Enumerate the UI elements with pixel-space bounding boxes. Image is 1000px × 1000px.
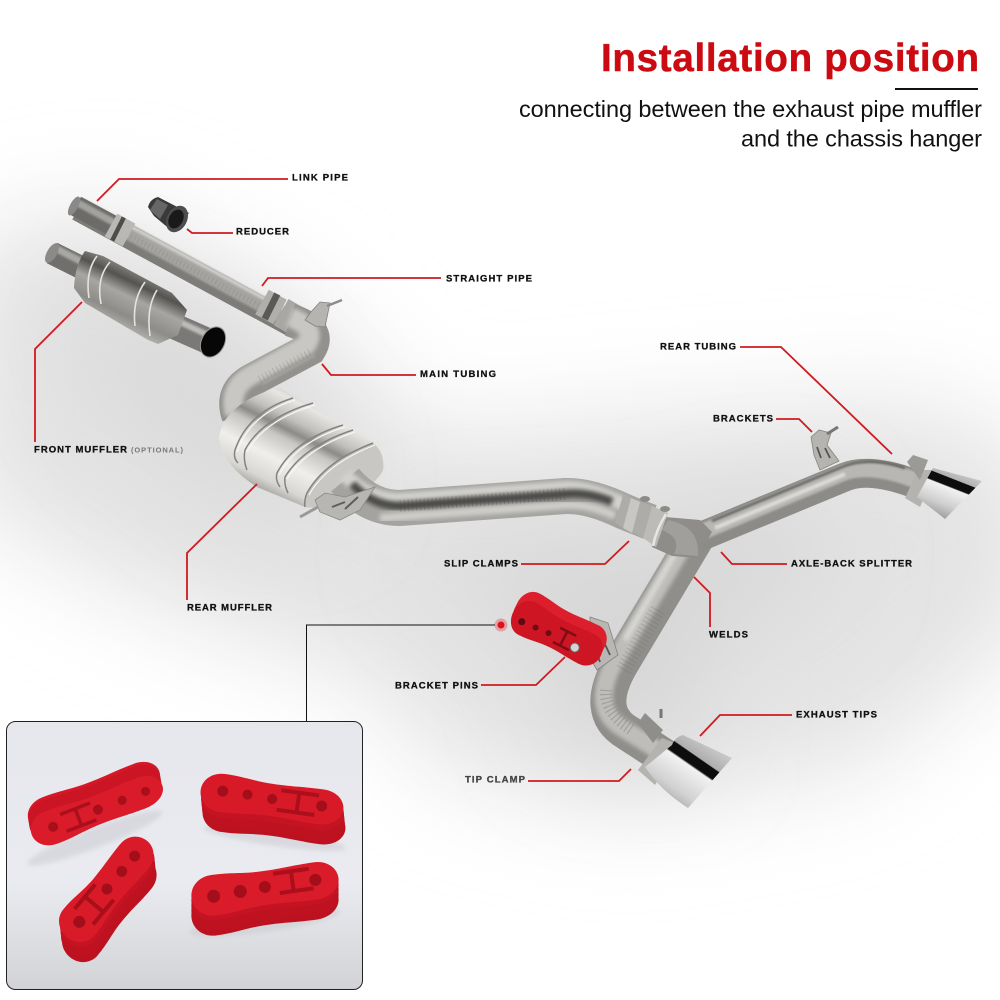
label: axle-back splitter bbox=[721, 552, 912, 570]
label: link pipe: LINK PIPE bbox=[292, 172, 348, 184]
black leader line bbox=[306, 625, 495, 722]
bracket: front bbox=[300, 487, 375, 520]
label: brackets bbox=[713, 414, 812, 432]
label: tip clamp bbox=[465, 769, 631, 786]
red dot marker bbox=[494, 618, 508, 632]
label: link pipe bbox=[97, 172, 348, 201]
slip clamps and splitter joint bbox=[615, 495, 712, 558]
subtitle bbox=[519, 96, 982, 152]
label: straight pipe bbox=[262, 274, 532, 286]
hanger: bottom right bbox=[188, 857, 342, 942]
label: front muffler: (OPTIONAL) bbox=[131, 446, 184, 454]
label: axle-back splitter: AXLE-BACK SPLITTER bbox=[791, 558, 912, 570]
label: front muffler: FRONT MUFFLER bbox=[34, 444, 127, 456]
label: bracket pins: BRACKET PINS bbox=[395, 680, 478, 692]
label: main tubing bbox=[322, 364, 496, 380]
label: tip clamp: TIP CLAMP bbox=[465, 774, 526, 786]
label: welds bbox=[694, 577, 748, 640]
label: exhaust tips bbox=[700, 710, 877, 736]
inset photo panel bbox=[6, 722, 362, 990]
label: reducer: REDUCER bbox=[236, 226, 289, 238]
label: front muffler bbox=[34, 302, 184, 456]
exhaust tip lower bbox=[638, 709, 732, 808]
label: main tubing: MAIN TUBING bbox=[420, 369, 496, 380]
over-axle pipe bbox=[345, 475, 650, 522]
label: rear tubing bbox=[660, 342, 892, 454]
hanger: top left bbox=[23, 755, 168, 873]
link and straight pipe bbox=[66, 195, 300, 325]
lower rear pipe bbox=[604, 531, 698, 759]
label: exhaust tips: EXHAUST TIPS bbox=[796, 710, 877, 720]
subtitle: and the chassis hanger bbox=[741, 126, 982, 152]
front muffler bbox=[42, 241, 231, 362]
title: Installation position bbox=[601, 37, 979, 80]
label: straight pipe: STRAIGHT PIPE bbox=[446, 274, 532, 284]
label: rear muffler: REAR MUFFLER bbox=[187, 602, 272, 614]
label: rear muffler bbox=[187, 484, 272, 614]
label: slip clamps bbox=[444, 541, 629, 570]
label: reducer bbox=[187, 226, 289, 238]
label: brackets: BRACKETS bbox=[713, 414, 773, 424]
hanger: top right bbox=[198, 771, 348, 856]
label: welds: WELDS bbox=[709, 630, 748, 640]
reducer bbox=[148, 197, 192, 236]
title underline bbox=[895, 88, 978, 90]
bracket: upper bbox=[305, 300, 342, 327]
red hanger on bracket bbox=[505, 587, 613, 672]
label: rear tubing: REAR TUBING bbox=[660, 342, 736, 352]
upper rear pipe bbox=[690, 462, 915, 541]
bracket: lower bbox=[590, 617, 618, 670]
subtitle: connecting between the exhaust pipe muffler bbox=[519, 96, 982, 122]
bracket: rear right bbox=[811, 427, 839, 470]
hanger: bottom left bbox=[51, 828, 166, 970]
label: slip clamps: SLIP CLAMPS bbox=[444, 558, 518, 570]
main tubing bbox=[233, 317, 315, 416]
label: bracket pins bbox=[395, 657, 565, 692]
rear muffler bbox=[219, 388, 383, 508]
exhaust tip right bbox=[905, 455, 982, 519]
